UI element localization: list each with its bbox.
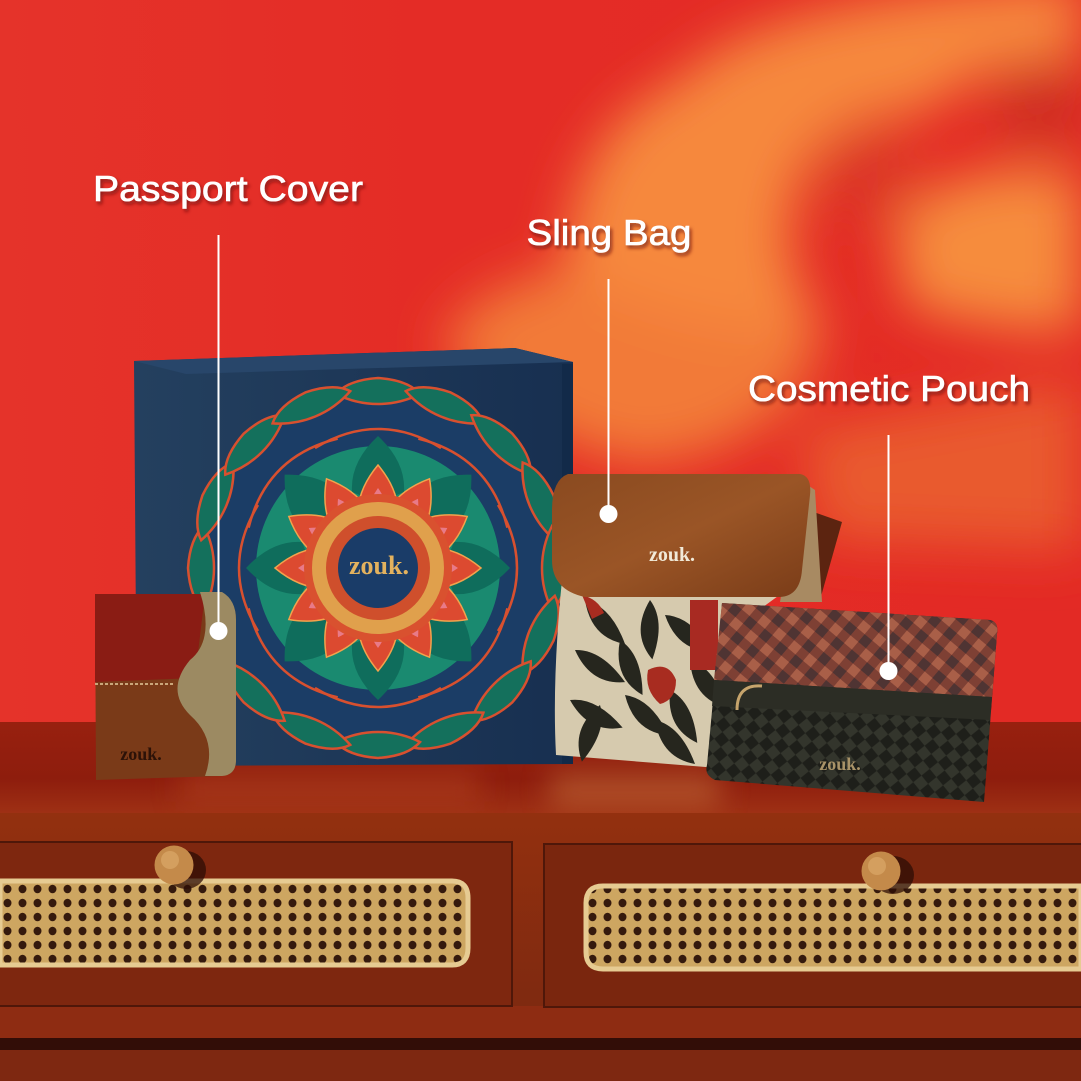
cosmetic pouch: zouk. [819,754,861,774]
drawer knob: right [862,852,914,894]
sling bag [552,474,842,768]
label: Passport Cover: Passport Cover [93,168,363,209]
passport cover [95,592,236,780]
table [0,722,1081,1081]
sling bag: zouk. [649,544,695,566]
label: Cosmetic Pouch [748,368,1030,680]
gift box [134,348,573,766]
label: Sling Bag: Sling Bag [526,212,692,253]
box logo: zouk. [349,551,409,580]
label: Sling Bag [526,212,692,523]
drawer knob: left [154,846,206,889]
label: Passport Cover [93,168,363,640]
drawer: left [0,842,512,1006]
passport cover: zouk. [120,744,162,764]
background wall [0,0,1081,740]
cosmetic pouch [706,603,997,802]
label: Cosmetic Pouch: Cosmetic Pouch [748,368,1030,409]
drawer: right [544,844,1081,1007]
mandala [186,376,570,760]
